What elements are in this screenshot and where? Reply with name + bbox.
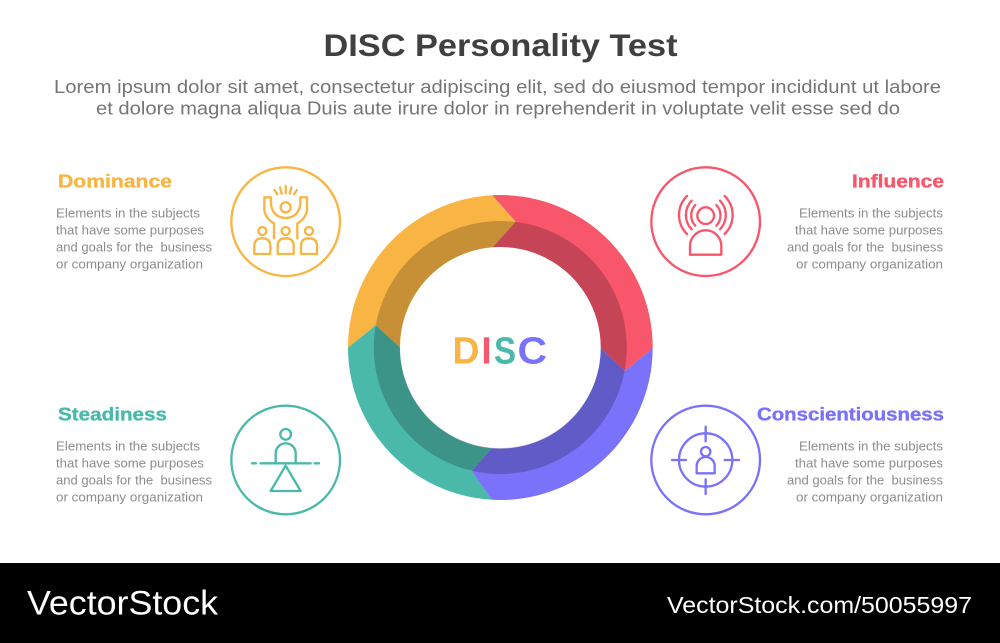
footer logo: VectorStock: [27, 584, 219, 622]
footer bar: [0, 563, 1000, 643]
center label: DISC: C: [518, 330, 547, 372]
text block: conscientiousness description: Elements in the subjects: [799, 438, 944, 454]
segment: influence: [492, 195, 653, 371]
text block: influence description: [787, 206, 944, 272]
text block: conscientiousness description: [787, 438, 944, 504]
text block: dominance description: that have some purposes: [56, 222, 204, 238]
icon: dominance crowd with raised arms: [231, 167, 340, 276]
icon: influence person broadcasting: [651, 167, 760, 276]
text block: dominance description: or company organization: [56, 256, 203, 272]
panel: steadiness text: [56, 404, 212, 504]
segment: conscientiousness: [472, 348, 653, 500]
text block: conscientiousness description: that have some purposes: [795, 456, 943, 470]
text block: influence description: Elements in the subjects: [799, 206, 944, 220]
text block: conscientiousness description: and goals for the business: [787, 472, 943, 488]
segment: dominance: [348, 195, 516, 348]
text block: influence description: and goals for the business: [787, 240, 943, 254]
heading: steadiness: Steadiness: [58, 404, 167, 424]
text block: dominance description: and goals for the business: [56, 240, 212, 254]
text block: steadiness description: and goals for the business: [56, 472, 212, 488]
title: DISC Personality Test: [324, 27, 678, 63]
text block: dominance description: Elements in the subjects: [56, 206, 201, 220]
text block: steadiness description: [56, 438, 212, 504]
center label: DISC: D: [452, 330, 480, 372]
subtitle text: [54, 76, 941, 118]
text block: steadiness description: that have some purposes: [56, 456, 204, 470]
text block: steadiness description: Elements in the subjects: [56, 438, 201, 454]
panel: influence text: [787, 170, 944, 272]
center label: DISC: [452, 330, 547, 372]
text block: steadiness description: or company organization: [56, 490, 203, 504]
heading: influence: Influence: [852, 170, 944, 192]
heading: conscientiousness: Conscientiousness: [757, 404, 944, 424]
center label: DISC: I: [482, 330, 492, 372]
icon: steadiness person balancing: [231, 406, 340, 514]
text block: dominance description: [56, 206, 212, 272]
subtitle text: et dolore magna aliqua Duis aute irure dolor in reprehenderit in voluptate velit esse sed do: [96, 98, 900, 118]
panel: dominance text: [56, 170, 212, 272]
subtitle text: Lorem ipsum dolor sit amet, consectetur adipiscing elit, sed do eiusmod tempor incididunt ut labore: [54, 76, 941, 97]
text block: influence description: that have some purposes: [795, 222, 943, 238]
segment: steadiness: [348, 325, 492, 500]
panel: conscientiousness text: [757, 404, 944, 504]
text block: conscientiousness description: or company organization: [796, 490, 943, 504]
inner shaded band: [374, 221, 627, 474]
heading: dominance: Dominance: [58, 170, 172, 192]
center label: DISC: S: [494, 330, 516, 372]
text block: influence description: or company organization: [796, 256, 943, 272]
footer url: VectorStock.com/50055997: [667, 592, 972, 618]
chart: DISC ring: [348, 195, 653, 500]
icon: conscientiousness person in target: [651, 406, 760, 514]
